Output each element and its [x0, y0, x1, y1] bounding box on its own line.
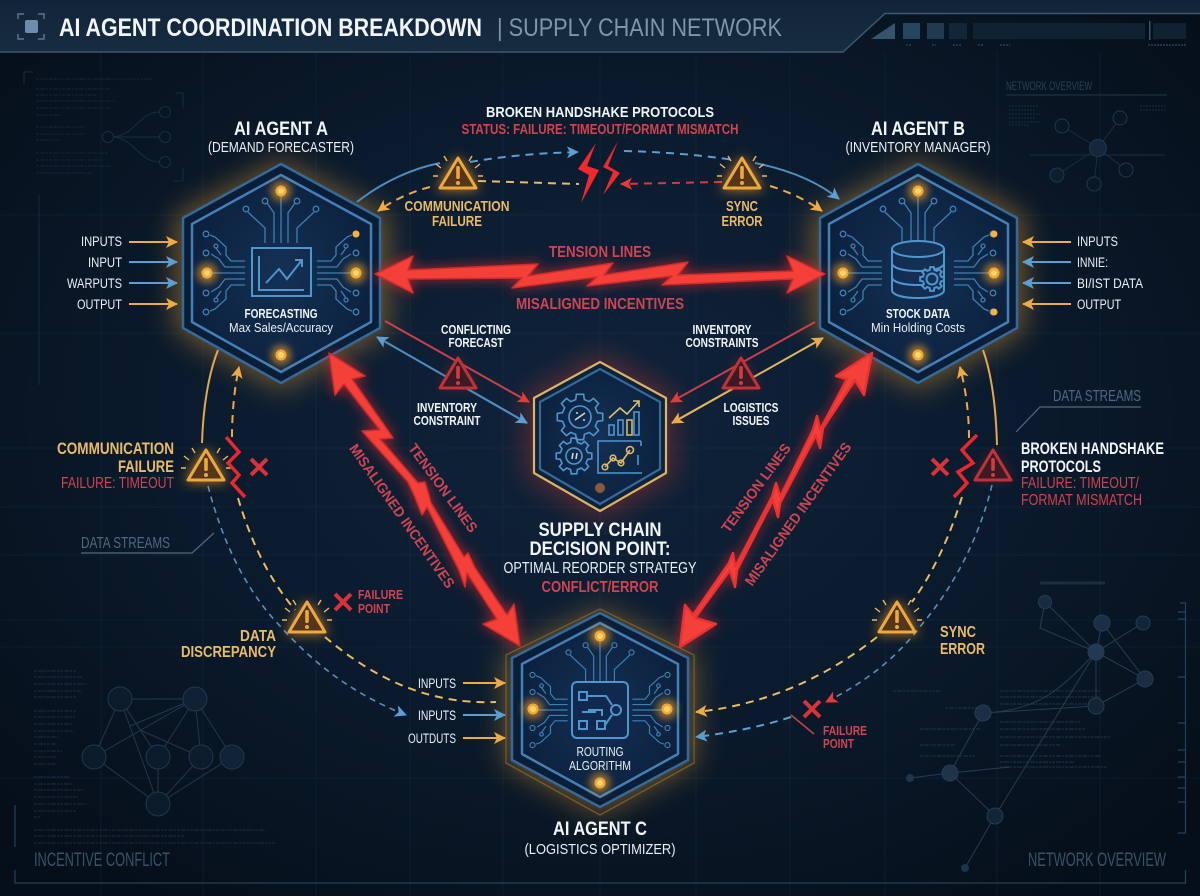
- connector: top right links: [621, 151, 839, 211]
- decision point hexagon: [534, 362, 666, 511]
- label: misaligned left diagonal: MISALIGNED INCENTIVES: [345, 442, 457, 592]
- label: conflicting forecast: CONFLICTING: [441, 323, 511, 337]
- warning: inventory constraints: [722, 358, 760, 388]
- label: logistics issues: [724, 401, 778, 428]
- agent B hexagon: [820, 164, 1017, 383]
- label: communication failure: COMMUNICATION: [404, 198, 510, 215]
- tension arrow: A to C: [329, 353, 520, 646]
- label: conflicting forecast: [441, 323, 511, 350]
- background decor: top-left schematic: [24, 72, 183, 385]
- sync error warning: lower right: [872, 600, 985, 658]
- connector: right arc: [696, 350, 997, 737]
- label: forecasting: [229, 306, 333, 335]
- decor frame and ruler: [15, 603, 1186, 883]
- failure point: lower left: FAILURE: [358, 588, 403, 602]
- agent A hexagon: [183, 164, 380, 383]
- icon: line panel: [598, 441, 642, 473]
- inputs: agent B: INPUTS: [1077, 234, 1118, 249]
- icon: bar chart: [609, 401, 639, 435]
- label: logistics issues: LOGISTICS: [724, 401, 778, 415]
- hexagon glows: [175, 160, 1025, 816]
- lightning: [226, 437, 245, 497]
- warning: conflicting forecast: [439, 358, 477, 388]
- warning icon: [181, 448, 231, 482]
- background decor: lower-right network: [893, 583, 1153, 872]
- label: stock data: STOCK DATA: [886, 306, 950, 321]
- icon: forecast chart: [252, 248, 311, 296]
- tension arrow: B to C: [680, 353, 872, 647]
- agent B title: (INVENTORY MANAGER): [846, 139, 990, 156]
- icon: central lightning: [578, 141, 620, 203]
- label: inventory constraint: [414, 401, 481, 428]
- label: forecasting: FORECASTING: [244, 306, 318, 321]
- agent C title: [524, 819, 676, 858]
- failure point: lower right: [791, 701, 867, 751]
- label: routing algorithm: [569, 744, 631, 773]
- failure x: [932, 459, 948, 475]
- label: data streams right: DATA STREAMS: [1053, 388, 1141, 405]
- right failure cluster: FAILURE: TIMEOUT/: [1021, 475, 1140, 492]
- left failure cluster: FAILURE: TIMEOUT: [61, 475, 174, 492]
- inputs: agent B: OUTPUT: [1077, 297, 1121, 312]
- failure point: lower right: POINT: [823, 737, 854, 751]
- label: conflicting forecast: FORECAST: [448, 336, 504, 350]
- label: forecasting: Max Sales/Accuracy: [229, 320, 333, 335]
- icon: focus target: [18, 14, 44, 39]
- connector: left arc: [202, 350, 496, 715]
- agent A title: (DEMAND FORECASTER): [208, 139, 354, 156]
- agent A title: [208, 119, 354, 156]
- icon: gears: [556, 394, 603, 474]
- label: routing algorithm: ROUTING: [576, 744, 624, 759]
- title: AI AGENT COORDINATION BREAKDOWN: [59, 14, 482, 42]
- right failure cluster: BROKEN HANDSHAKE: [1021, 440, 1164, 458]
- background decor: top-right network overview: NETWORK OVERVIEW: [1006, 81, 1092, 93]
- agent B title: [846, 119, 990, 156]
- label: sync error: SYNC: [726, 198, 758, 215]
- inputs: agent C: INPUTS: [418, 676, 456, 691]
- header bar: [0, 0, 1200, 52]
- label: routing algorithm: ALGORITHM: [569, 758, 631, 773]
- status dots B: [833, 181, 1004, 365]
- label: communication failure: [404, 198, 510, 230]
- failure x: [251, 459, 267, 475]
- failure point: lower left: [335, 588, 403, 616]
- background decor: lower-left network: [34, 671, 275, 843]
- failure point: lower left: POINT: [358, 602, 390, 616]
- label: communication failure: FAILURE: [432, 213, 482, 230]
- header status strip: [871, 21, 1186, 45]
- inputs: agent A: WARPUTS: [67, 276, 122, 291]
- inputs: agent A: OUTPUT: [77, 297, 122, 312]
- connector: central diagonal links: [377, 321, 823, 423]
- right failure cluster: FORMAT MISMATCH: [1021, 492, 1142, 509]
- label: misaligned incentives horizontal: MISALIGNED INCENTIVES: [516, 296, 684, 313]
- decision point text: SUPPLY CHAIN: [538, 520, 662, 541]
- inputs: agent C: OUTDUTS: [408, 731, 456, 746]
- lightning: [954, 435, 977, 497]
- left failure cluster: FAILURE: [118, 458, 174, 476]
- warning: communication failure: [433, 156, 483, 190]
- agent A title: AI AGENT A: [234, 119, 328, 140]
- decision point text: DECISION POINT:: [530, 539, 670, 560]
- inputs: agent A: [67, 234, 177, 312]
- status dots C: [523, 626, 677, 793]
- warning: sync error: [717, 156, 767, 190]
- label: sync error: [722, 198, 763, 230]
- circuit traces C: [530, 640, 670, 748]
- circuit traces A: [203, 195, 359, 315]
- label: inventory constraint: CONSTRAINT: [414, 414, 481, 428]
- decision point text: OPTIMAL REORDER STRATEGY: [504, 560, 696, 577]
- tension arrow: A to B: [375, 256, 825, 293]
- inputs: agent C: [408, 676, 505, 746]
- broken handshake heading: [462, 104, 738, 138]
- agent C hexagon: [506, 609, 694, 815]
- inputs: agent A: INPUT: [88, 255, 122, 270]
- status dots A: [197, 181, 366, 365]
- label: stock data: [871, 306, 965, 335]
- icon: database: [892, 241, 944, 298]
- data discrepancy warning: DATA: [240, 628, 276, 645]
- background decor: top-right network overview: [1006, 81, 1167, 191]
- label: stock data: Min Holding Costs: [871, 320, 965, 335]
- label: incentive conflict: INCENTIVE CONFLICT: [34, 850, 170, 871]
- inputs: agent B: [1023, 234, 1143, 312]
- inputs: agent B: INNIE:: [1077, 255, 1108, 270]
- warning icon: [974, 450, 1012, 480]
- left failure cluster: [57, 437, 267, 497]
- data discrepancy warning: DISCREPANCY: [181, 644, 277, 661]
- decision point text: CONFLICT/ERROR: [542, 579, 658, 596]
- agent C title: (LOGISTICS OPTIMIZER): [524, 841, 676, 858]
- right failure cluster: PROTOCOLS: [1021, 458, 1101, 476]
- label: tension lines right diagonal: TENSION LINES: [719, 441, 795, 536]
- broken handshake heading: STATUS: FAILURE: TIMEOUT/FORMAT MISMATCH: [462, 122, 738, 138]
- label: sync error: ERROR: [722, 213, 763, 230]
- inputs: agent A: INPUTS: [81, 234, 122, 249]
- label: inventory constraints: INVENTORY: [692, 323, 752, 337]
- connector: top left links: [357, 152, 579, 211]
- agent C title: AI AGENT C: [553, 819, 647, 840]
- left failure cluster: COMMUNICATION: [57, 440, 174, 458]
- data discrepancy warning: [181, 600, 332, 661]
- agent B title: AI AGENT B: [871, 119, 965, 140]
- sync error warning: lower right: SYNC: [940, 624, 976, 641]
- subtitle: | SUPPLY CHAIN NETWORK: [497, 14, 782, 42]
- label: inventory constraints: [686, 323, 758, 350]
- dim dot: [595, 483, 605, 493]
- label: data streams right: [1016, 388, 1141, 432]
- sync error warning: lower right: ERROR: [940, 641, 985, 658]
- label: inventory constraint: INVENTORY: [417, 401, 478, 415]
- label: tension lines left diagonal: TENSION LINES: [404, 441, 480, 536]
- broken handshake heading: BROKEN HANDSHAKE PROTOCOLS: [486, 104, 714, 121]
- label: logistics issues: ISSUES: [732, 414, 770, 428]
- decision point text: [504, 520, 696, 596]
- inputs: agent B: BI/IST DATA: [1077, 276, 1143, 291]
- label: misaligned right diagonal: MISALIGNED INCENTIVES: [742, 440, 855, 589]
- icon: routing: [572, 682, 628, 738]
- right failure cluster: [932, 435, 1164, 509]
- label: data streams left: DATA STREAMS: [81, 535, 170, 552]
- circuit traces B: [840, 195, 996, 315]
- label: tension lines horizontal: TENSION LINES: [549, 244, 651, 261]
- label: inventory constraints: CONSTRAINTS: [686, 336, 758, 350]
- failure point: lower right: FAILURE: [823, 724, 867, 738]
- inputs: agent C: INPUTS: [418, 708, 456, 723]
